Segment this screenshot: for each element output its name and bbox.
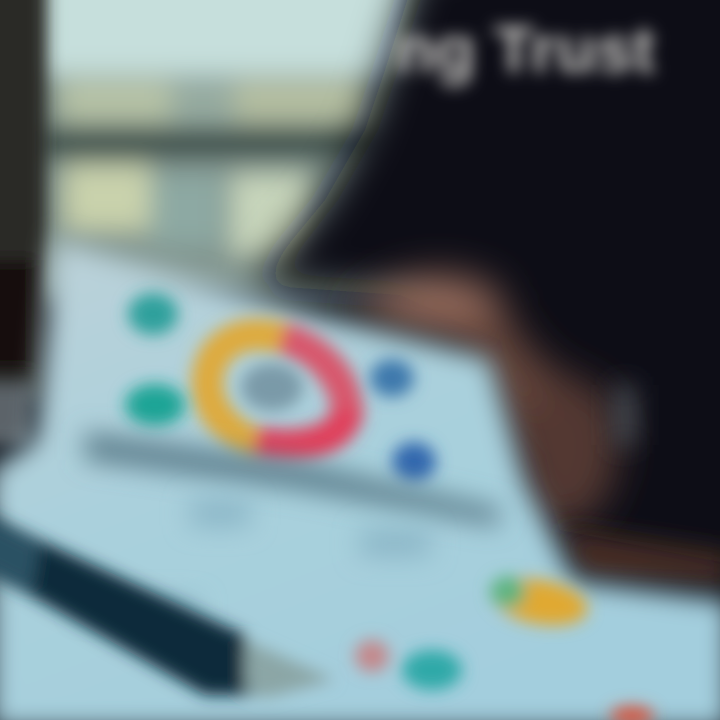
lower right brown edge [560, 530, 720, 585]
blue dots [370, 359, 436, 482]
report paper [0, 240, 720, 720]
heading bar on report [85, 432, 500, 526]
small colour marks [355, 640, 654, 720]
dark left pillar [0, 0, 46, 445]
title: ng Trust [395, 12, 655, 86]
teal dots [125, 293, 185, 426]
donut centre [241, 363, 303, 411]
small donut chart [489, 572, 591, 632]
cuff highlight [615, 385, 635, 445]
window background [20, 0, 460, 300]
pen [0, 510, 335, 698]
donut chart [207, 335, 347, 446]
hand [345, 274, 616, 530]
small report text [80, 500, 430, 612]
dark sleeve figure [255, 0, 720, 570]
